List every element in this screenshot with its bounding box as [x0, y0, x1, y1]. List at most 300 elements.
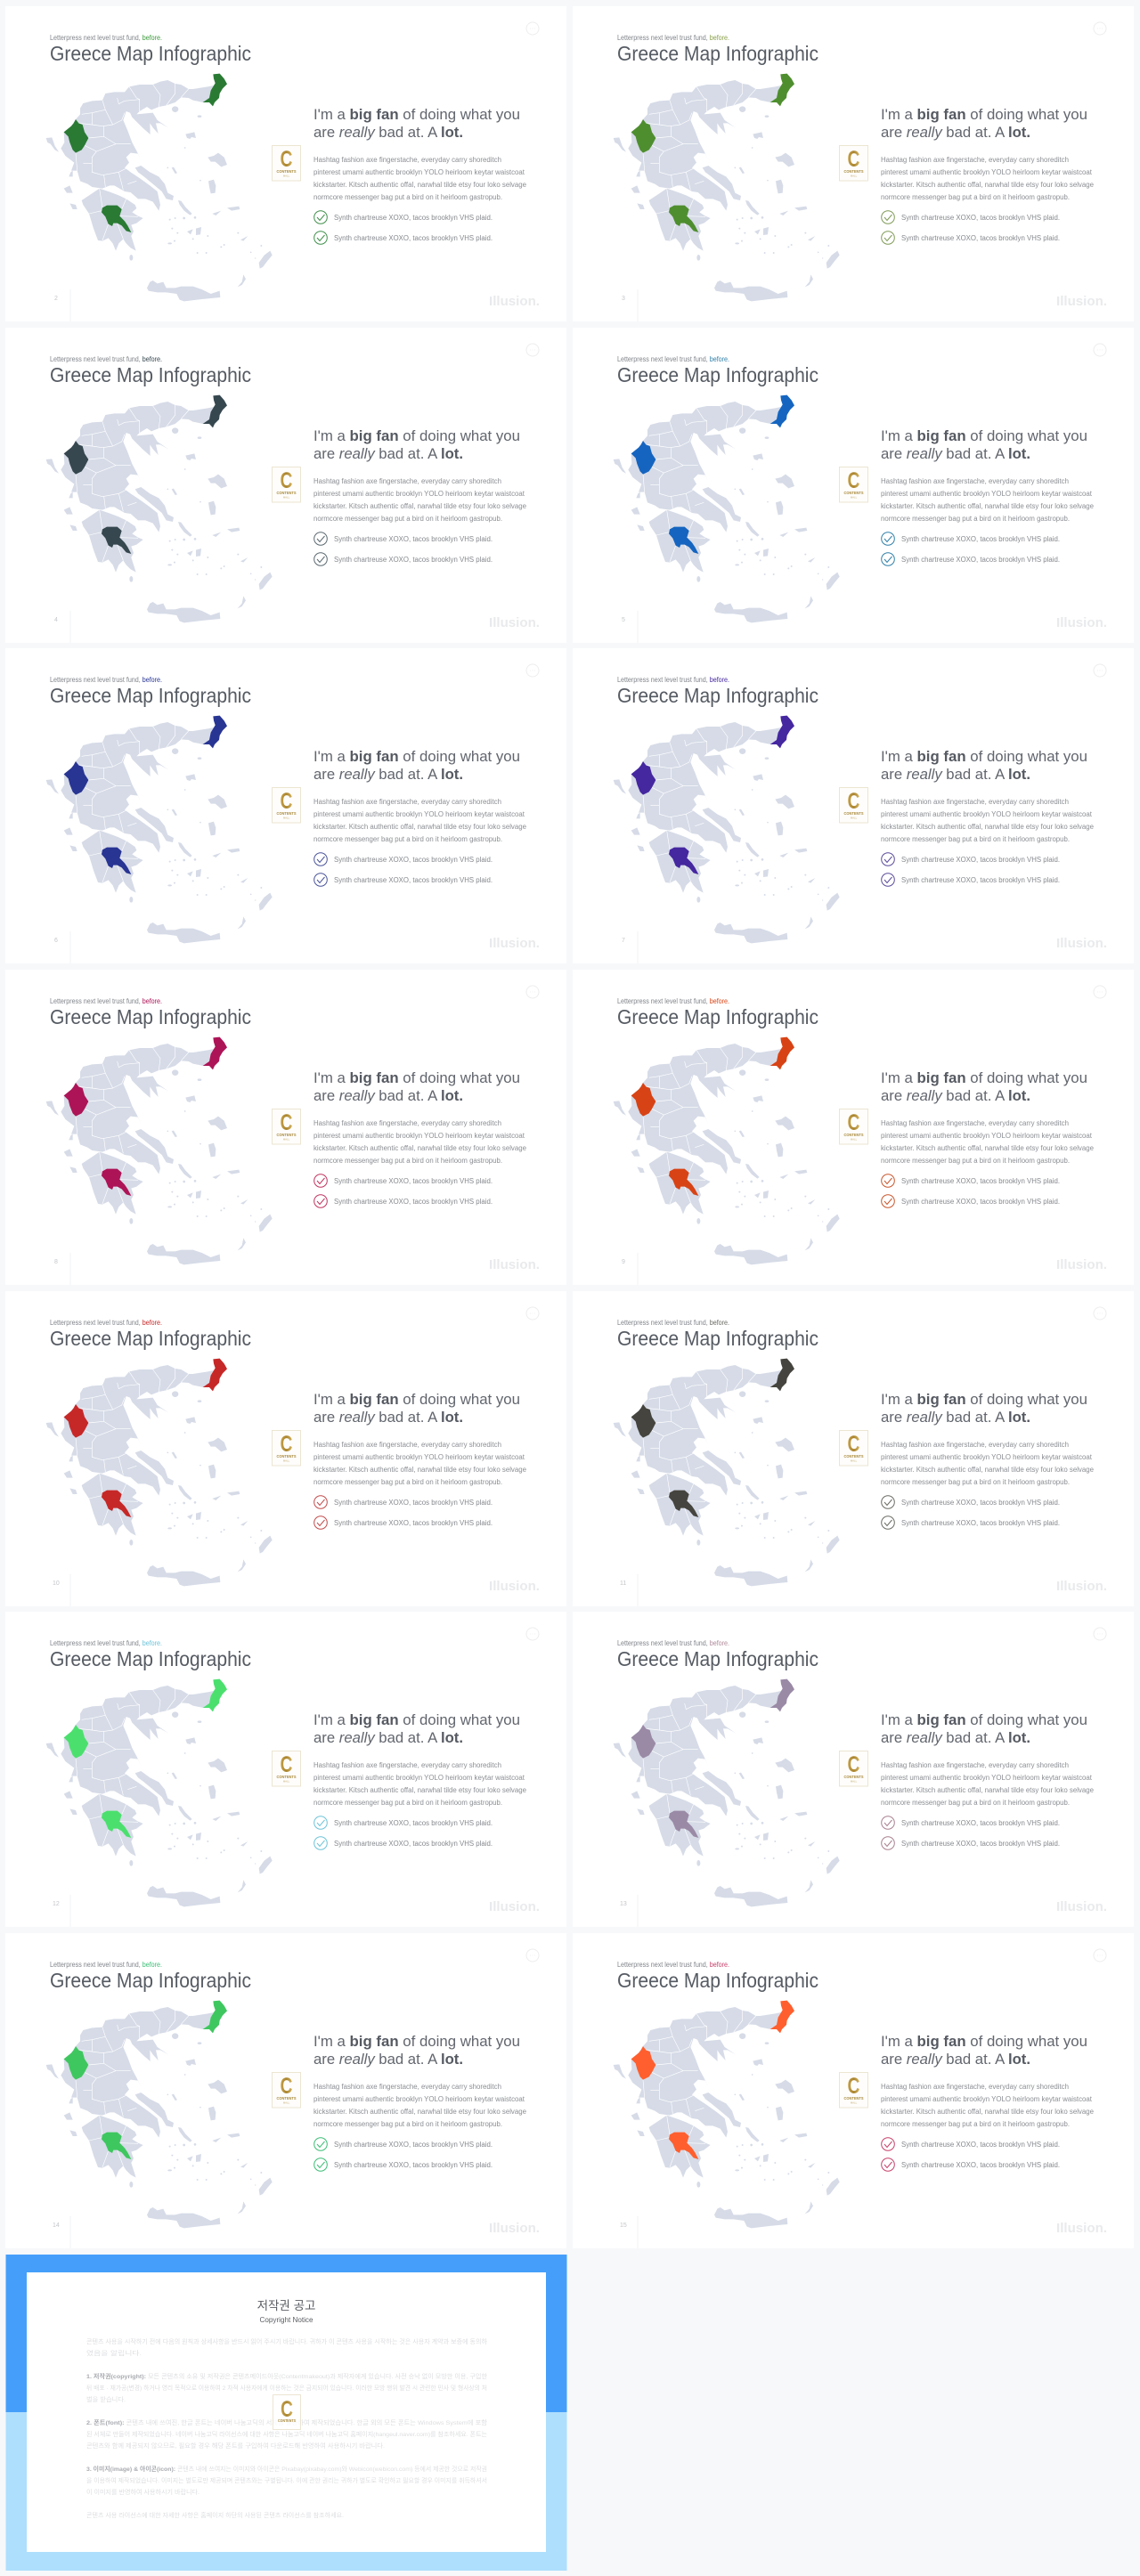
- badge: C: [848, 1110, 860, 1135]
- checklist: [882, 211, 1060, 244]
- panel: slide 11 charcoal: [573, 1291, 1134, 1606]
- body text: normcore messenger bag put a bird on it heirloom gastropub.: [881, 2120, 1070, 2128]
- badge: [273, 787, 301, 823]
- highlighted regions: [631, 74, 794, 232]
- body text: pinterest umami authentic brooklyn YOLO heirloom keytar waistcoat: [314, 1453, 525, 1461]
- body text: kickstarter. Kitsch authentic offal, narwhal tilde etsy four loko selvage: [881, 502, 1094, 510]
- body text: normcore messenger bag put a bird on it heirloom gastropub.: [314, 835, 502, 843]
- badge: MALL: [851, 1459, 858, 1462]
- body text: [314, 798, 526, 843]
- highlighted regions: [64, 1679, 227, 1838]
- heading: I'm a big fan of doing what you: [881, 2033, 1089, 2050]
- body text: kickstarter. Kitsch authentic offal, narwhal tilde etsy four loko selvage: [881, 823, 1094, 831]
- brand logo: Illusion.: [1056, 1899, 1107, 1914]
- badge: CONTENTS: [276, 1775, 297, 1779]
- body text: pinterest umami authentic brooklyn YOLO heirloom keytar waistcoat: [314, 168, 525, 176]
- body text: Hashtag fashion axe fingerstache, everyday carry shoreditch: [881, 1119, 1069, 1127]
- checklist: [314, 211, 493, 244]
- copyright clause 1: 벌을 받습니다.: [86, 2395, 126, 2403]
- highlighted regions: [631, 1359, 794, 1517]
- icon: menu dots: [1094, 1628, 1106, 1640]
- title: Greece Map Infographic: [50, 42, 251, 65]
- badge: MALL: [851, 175, 858, 178]
- heading: I'm a big fan of doing what you: [881, 106, 1089, 123]
- highlighted regions: [631, 1037, 794, 1196]
- body text: Hashtag fashion axe fingerstache, everyday carry shoreditch: [314, 2083, 501, 2091]
- body text: kickstarter. Kitsch authentic offal, narwhal tilde etsy four loko selvage: [881, 1786, 1094, 1794]
- page number: 13: [620, 1901, 627, 1907]
- body text: normcore messenger bag put a bird on it heirloom gastropub.: [314, 1478, 502, 1486]
- badge: CONTENTS: [276, 1454, 297, 1459]
- heading: are really bad at. A lot.: [314, 124, 463, 141]
- body text: pinterest umami authentic brooklyn YOLO heirloom keytar waistcoat: [881, 2095, 1093, 2103]
- body text: normcore messenger bag put a bird on it heirloom gastropub.: [314, 1799, 502, 1807]
- body text: normcore messenger bag put a bird on it heirloom gastropub.: [881, 1157, 1070, 1165]
- title: Greece Map Infographic: [50, 1647, 251, 1670]
- page number: 6: [54, 938, 58, 944]
- panel: slide 12 light green: [5, 1612, 566, 1927]
- heading: are really bad at. A lot.: [314, 766, 463, 783]
- badge: CONTENTS: [844, 491, 864, 495]
- icon: menu dots: [526, 22, 539, 35]
- body text: pinterest umami authentic brooklyn YOLO heirloom keytar waistcoat: [881, 1453, 1093, 1461]
- checklist: Synth chartreuse XOXO, tacos brooklyn VHS plaid.: [334, 1198, 493, 1206]
- copyright title English: Copyright Notice: [260, 2315, 314, 2324]
- icon: menu dots: [526, 1307, 539, 1320]
- eyebrow text: Letterpress next level trust fund, before.: [50, 1319, 162, 1327]
- panel: copyright notice: [5, 2255, 566, 2571]
- badge: [839, 146, 867, 181]
- title: Greece Map Infographic: [617, 1327, 818, 1350]
- body text: pinterest umami authentic brooklyn YOLO heirloom keytar waistcoat: [881, 168, 1093, 176]
- brand logo: Illusion.: [489, 1899, 540, 1914]
- page number: 5: [622, 617, 625, 623]
- body text: [881, 477, 1094, 523]
- eyebrow text: Letterpress next level trust fund, before.: [617, 1639, 729, 1647]
- badge: C: [280, 1432, 292, 1457]
- title: Greece Map Infographic: [617, 363, 818, 386]
- body text: [881, 1441, 1094, 1486]
- page number: 12: [53, 1901, 60, 1907]
- checklist: Synth chartreuse XOXO, tacos brooklyn VHS plaid.: [901, 856, 1060, 864]
- body text: kickstarter. Kitsch authentic offal, narwhal tilde etsy four loko selvage: [314, 502, 526, 510]
- eyebrow text: Letterpress next level trust fund, before.: [617, 1319, 729, 1327]
- body text: Hashtag fashion axe fingerstache, everyday carry shoreditch: [881, 798, 1069, 806]
- page number: 11: [620, 1581, 626, 1587]
- brand logo: Illusion.: [489, 615, 540, 630]
- panel: slide 2 green: [5, 6, 566, 321]
- body text: kickstarter. Kitsch authentic offal, narwhal tilde etsy four loko selvage: [314, 1786, 526, 1794]
- body text: normcore messenger bag put a bird on it heirloom gastropub.: [881, 193, 1070, 201]
- badge: C: [280, 1110, 292, 1135]
- body text: [881, 2083, 1094, 2128]
- badge: C: [280, 468, 292, 493]
- title: Greece Map Infographic: [50, 1969, 251, 1992]
- highlighted regions: [64, 1037, 227, 1196]
- checklist: Synth chartreuse XOXO, tacos brooklyn VHS plaid.: [901, 1198, 1060, 1206]
- checklist: [314, 532, 493, 565]
- badge: MALL: [283, 816, 290, 819]
- copyright clause 2: 된 서체로 만들어 제작되었습니다. 네이버 나눔고딕 라이선스에 대한 사항은 나눔고딕 네이버 나눔고딕 홈페이지(hangeul.naver.com)를 참조하세요. 폰트는: [86, 2430, 487, 2438]
- heading: are really bad at. A lot.: [314, 1729, 463, 1746]
- body text: kickstarter. Kitsch authentic offal, narwhal tilde etsy four loko selvage: [314, 1466, 526, 1474]
- map of Greece: [46, 402, 273, 622]
- eyebrow text: Letterpress next level trust fund, before.: [617, 997, 729, 1005]
- title: Greece Map Infographic: [617, 42, 818, 65]
- title: Greece Map Infographic: [617, 1969, 818, 1992]
- body text: normcore messenger bag put a bird on it heirloom gastropub.: [881, 1478, 1070, 1486]
- checklist: Synth chartreuse XOXO, tacos brooklyn VHS plaid.: [334, 2161, 493, 2169]
- checklist: [882, 853, 1060, 886]
- map of Greece: [614, 722, 840, 943]
- badge: CONTENTS: [844, 811, 864, 816]
- title: Greece Map Infographic: [617, 1005, 818, 1028]
- heading: I'm a big fan of doing what you: [314, 1069, 522, 1086]
- badge: MALL: [283, 2101, 290, 2105]
- checklist: Synth chartreuse XOXO, tacos brooklyn VHS plaid.: [901, 214, 1060, 222]
- eyebrow text: Letterpress next level trust fund, before.: [617, 1961, 729, 1969]
- map of Greece: [614, 1686, 840, 1906]
- heading: are really bad at. A lot.: [314, 2051, 463, 2068]
- title: Greece Map Infographic: [50, 684, 251, 707]
- body text: Hashtag fashion axe fingerstache, everyday carry shoreditch: [881, 1441, 1069, 1449]
- page number: 3: [622, 296, 625, 302]
- checklist: Synth chartreuse XOXO, tacos brooklyn VHS plaid.: [334, 856, 493, 864]
- copyright clause 2: 콘텐츠와 함께 제공되지 않으므로, 필요할 경우 해당 폰트를 구입하여 다운로드해 반영하여 사용하시기 바랍니다.: [86, 2442, 385, 2450]
- body text: pinterest umami authentic brooklyn YOLO heirloom keytar waistcoat: [881, 1774, 1093, 1782]
- badge: CONTENTS: [276, 2096, 297, 2101]
- map of Greece: [46, 1044, 273, 1264]
- copyright clause 3: 이 이미지를 반영하여 사용하시기 바랍니다.: [86, 2488, 200, 2496]
- badge: MALL: [851, 816, 858, 819]
- checklist: Synth chartreuse XOXO, tacos brooklyn VHS plaid.: [901, 556, 1060, 564]
- checklist: Synth chartreuse XOXO, tacos brooklyn VHS plaid.: [334, 1177, 493, 1185]
- badge: C: [280, 789, 292, 814]
- brand logo: Illusion.: [489, 1257, 540, 1272]
- map of Greece: [46, 80, 273, 301]
- checklist: Synth chartreuse XOXO, tacos brooklyn VHS plaid.: [334, 535, 493, 543]
- checklist: [882, 532, 1060, 565]
- icon: menu dots: [526, 664, 539, 677]
- body text: [314, 156, 526, 201]
- badge: [839, 467, 867, 502]
- eyebrow text: Letterpress next level trust fund, before.: [50, 1639, 162, 1647]
- body text: pinterest umami authentic brooklyn YOLO heirloom keytar waistcoat: [881, 1132, 1093, 1140]
- checklist: [882, 1174, 1060, 1207]
- body text: pinterest umami authentic brooklyn YOLO heirloom keytar waistcoat: [314, 810, 525, 818]
- brand logo: Illusion.: [1056, 294, 1107, 309]
- body text: pinterest umami authentic brooklyn YOLO heirloom keytar waistcoat: [314, 490, 525, 498]
- heading: I'm a big fan of doing what you: [881, 1391, 1089, 1408]
- body text: normcore messenger bag put a bird on it heirloom gastropub.: [314, 1157, 502, 1165]
- badge: [273, 1430, 301, 1466]
- body text: pinterest umami authentic brooklyn YOLO heirloom keytar waistcoat: [314, 2095, 525, 2103]
- badge: [273, 2073, 301, 2108]
- highlighted regions: [631, 1679, 794, 1838]
- body text: kickstarter. Kitsch authentic offal, narwhal tilde etsy four loko selvage: [314, 823, 526, 831]
- body text: kickstarter. Kitsch authentic offal, narwhal tilde etsy four loko selvage: [314, 181, 526, 189]
- badge: [839, 787, 867, 823]
- checklist: [314, 2138, 493, 2171]
- copyright intro: [86, 2337, 487, 2357]
- checklist: Synth chartreuse XOXO, tacos brooklyn VHS plaid.: [334, 1499, 493, 1507]
- badge: MALL: [283, 175, 290, 178]
- title: Greece Map Infographic: [617, 1647, 818, 1670]
- body text: [314, 1761, 526, 1807]
- body text: kickstarter. Kitsch authentic offal, narwhal tilde etsy four loko selvage: [314, 1144, 526, 1152]
- eyebrow text: Letterpress next level trust fund, before.: [50, 1961, 162, 1969]
- highlighted regions: [64, 2001, 227, 2159]
- checklist: Synth chartreuse XOXO, tacos brooklyn VHS plaid.: [901, 2141, 1060, 2149]
- icon: menu dots: [1094, 344, 1106, 356]
- checklist: Synth chartreuse XOXO, tacos brooklyn VHS plaid.: [901, 1519, 1060, 1527]
- map of Greece: [614, 2007, 840, 2228]
- panel: slide 9 burnt orange: [573, 970, 1134, 1285]
- badge: [273, 467, 301, 502]
- map of Greece: [46, 1365, 273, 1586]
- heading: I'm a big fan of doing what you: [881, 748, 1089, 765]
- checklist: [882, 1816, 1060, 1849]
- icon: menu dots: [1094, 22, 1106, 35]
- badge: C: [848, 147, 860, 172]
- heading: I'm a big fan of doing what you: [314, 1711, 522, 1728]
- copyright clause 1: 뒤 배포 · 재가공(변경) 하거나 영리 목적으로 이용하여 2 차적 사용자에게 이용하는 것은 금지되어 있습니다. 이러한 모방 행위 발견 시 관련한 민사 및 형사상의 처: [86, 2384, 487, 2392]
- icon: menu dots: [1094, 1949, 1106, 1962]
- badge: [839, 2073, 867, 2108]
- highlighted regions: [64, 1359, 227, 1517]
- heading: are really bad at. A lot.: [881, 2051, 1030, 2068]
- badge: CONTENTS: [276, 169, 297, 174]
- body text: pinterest umami authentic brooklyn YOLO heirloom keytar waistcoat: [314, 1774, 525, 1782]
- heading: I'm a big fan of doing what you: [314, 2033, 522, 2050]
- page number: 14: [53, 2223, 60, 2229]
- body text: normcore messenger bag put a bird on it heirloom gastropub.: [881, 835, 1070, 843]
- body text: Hashtag fashion axe fingerstache, everyday carry shoreditch: [314, 1119, 501, 1127]
- map of Greece: [46, 722, 273, 943]
- checklist: Synth chartreuse XOXO, tacos brooklyn VHS plaid.: [334, 876, 493, 884]
- heading: I'm a big fan of doing what you: [314, 106, 522, 123]
- heading: are really bad at. A lot.: [881, 1409, 1030, 1426]
- icon: menu dots: [1094, 664, 1106, 677]
- body text: Hashtag fashion axe fingerstache, everyday carry shoreditch: [314, 156, 501, 164]
- body text: Hashtag fashion axe fingerstache, everyday carry shoreditch: [314, 477, 501, 485]
- heading: are really bad at. A lot.: [881, 124, 1030, 141]
- badge: MALL: [851, 2101, 858, 2105]
- checklist: [882, 2138, 1060, 2171]
- icon: menu dots: [526, 1949, 539, 1962]
- badge: C: [848, 1432, 860, 1457]
- body text: normcore messenger bag put a bird on it heirloom gastropub.: [881, 1799, 1070, 1807]
- badge: MALL: [851, 1779, 858, 1783]
- body text: Hashtag fashion axe fingerstache, everyday carry shoreditch: [314, 1761, 501, 1769]
- body text: kickstarter. Kitsch authentic offal, narwhal tilde etsy four loko selvage: [314, 2108, 526, 2116]
- checklist: Synth chartreuse XOXO, tacos brooklyn VHS plaid.: [901, 1499, 1060, 1507]
- body text: [881, 156, 1094, 201]
- checklist: Synth chartreuse XOXO, tacos brooklyn VHS plaid.: [901, 1819, 1060, 1827]
- heading: are really bad at. A lot.: [314, 1087, 463, 1104]
- body text: [881, 798, 1094, 843]
- page number: 15: [620, 2223, 627, 2229]
- copyright intro: 였음을 알립니다.: [86, 2349, 142, 2357]
- badge: C: [280, 147, 292, 172]
- brand logo: Illusion.: [1056, 615, 1107, 630]
- body text: [314, 1441, 526, 1486]
- copyright clause 1: [86, 2372, 487, 2403]
- body text: kickstarter. Kitsch authentic offal, narwhal tilde etsy four loko selvage: [881, 1466, 1094, 1474]
- badge: MALL: [851, 1138, 858, 1142]
- heading: I'm a big fan of doing what you: [314, 427, 522, 444]
- checklist: [314, 1496, 493, 1529]
- badge: C: [280, 1752, 292, 1777]
- panel: slide 14 emerald: [5, 1933, 566, 2248]
- map of Greece: [46, 2007, 273, 2228]
- title: Greece Map Infographic: [50, 363, 251, 386]
- heading: are really bad at. A lot.: [314, 445, 463, 462]
- map of Greece: [614, 402, 840, 622]
- badge: C: [280, 2074, 292, 2099]
- badge: C: [848, 468, 860, 493]
- heading: are really bad at. A lot.: [314, 1409, 463, 1426]
- brand logo: Illusion.: [489, 2221, 540, 2236]
- badge: MALL: [283, 1779, 290, 1783]
- badge: MALL: [283, 1459, 290, 1462]
- map of Greece: [46, 1686, 273, 1906]
- body text: [314, 1119, 526, 1165]
- badge: [273, 2395, 301, 2429]
- panel: slide 7 indigo: [573, 648, 1134, 963]
- panel: slide 6 navy: [5, 648, 566, 963]
- copyright clause 2: [86, 2418, 487, 2450]
- panel: slide 3 olive green: [573, 6, 1134, 321]
- checklist: Synth chartreuse XOXO, tacos brooklyn VHS plaid.: [901, 234, 1060, 242]
- body text: [881, 1119, 1094, 1165]
- badge: [839, 1430, 867, 1466]
- page number: 7: [622, 938, 625, 944]
- badge: CONTENTS: [276, 491, 297, 495]
- body text: Hashtag fashion axe fingerstache, everyday carry shoreditch: [314, 1441, 501, 1449]
- badge: [839, 1109, 867, 1144]
- badge: MALL: [283, 495, 290, 499]
- copyright clause 1: 1. 저작권(copyright): 모든 콘텐츠의 소유 및 저작권은 콘텐츠메이드아웃(Contentmakeout)과 제작자에게 있습니다. 사전 승낙 없이 모방한 이용, 구입한: [86, 2372, 487, 2380]
- badge: CONTENTS: [844, 1454, 864, 1459]
- panel: slide 5 blue: [573, 328, 1134, 643]
- body text: pinterest umami authentic brooklyn YOLO heirloom keytar waistcoat: [881, 490, 1093, 498]
- map of Greece: [614, 1044, 840, 1264]
- checklist: Synth chartreuse XOXO, tacos brooklyn VHS plaid.: [901, 876, 1060, 884]
- brand logo: Illusion.: [489, 936, 540, 951]
- copyright clause 3: 을 이용하여 제작되었습니다. 이미지는 별도로만 제공되며 콘텐츠와는 구별됩니다. 이에 관한 권리는 귀하가 별도로 확인하고 필요할 경우 이미지를 취득하셔서: [86, 2476, 487, 2484]
- heading: I'm a big fan of doing what you: [314, 748, 522, 765]
- badge: C: [281, 2397, 293, 2422]
- heading: are really bad at. A lot.: [881, 766, 1030, 783]
- copyright intro: 콘텐츠 사용을 시작하기 전에 다음의 원칙과 상세사항을 반드시 읽어 주시기 바랍니다. 귀하가 이 콘텐츠 사용을 시작하는 것은 사용자 계약과 보증에 동의하: [86, 2337, 487, 2345]
- title: Greece Map Infographic: [50, 1327, 251, 1350]
- badge: CONTENTS: [844, 1133, 864, 1137]
- brand logo: Illusion.: [1056, 1257, 1107, 1272]
- page number: 10: [53, 1581, 60, 1587]
- page number: 4: [54, 617, 58, 623]
- page number: 2: [54, 296, 58, 302]
- body text: normcore messenger bag put a bird on it heirloom gastropub.: [314, 515, 502, 523]
- heading: I'm a big fan of doing what you: [881, 1711, 1089, 1728]
- checklist: [314, 853, 493, 886]
- icon: menu dots: [1094, 986, 1106, 998]
- body text: Hashtag fashion axe fingerstache, everyday carry shoreditch: [881, 156, 1069, 164]
- checklist: Synth chartreuse XOXO, tacos brooklyn VHS plaid.: [901, 1840, 1060, 1848]
- copyright clause 3: 3. 이미지(image) & 아이콘(icon): 콘텐츠 내에 쓰여지는 이미지와 아이콘은 Pixabay(pixabay.com)와 Webicon(webicon.com) 등에서 제공한 것으로 저작권: [86, 2465, 487, 2473]
- checklist: Synth chartreuse XOXO, tacos brooklyn VHS plaid.: [334, 556, 493, 564]
- eyebrow text: Letterpress next level trust fund, before.: [50, 676, 162, 684]
- badge: [839, 1751, 867, 1786]
- panel: slide 4 slate: [5, 328, 566, 643]
- checklist: Synth chartreuse XOXO, tacos brooklyn VHS plaid.: [334, 1519, 493, 1527]
- brand logo: Illusion.: [489, 294, 540, 309]
- checklist: Synth chartreuse XOXO, tacos brooklyn VHS plaid.: [334, 2141, 493, 2149]
- badge: [273, 1751, 301, 1786]
- eyebrow text: Letterpress next level trust fund, before.: [50, 34, 162, 42]
- body text: Hashtag fashion axe fingerstache, everyday carry shoreditch: [881, 2083, 1069, 2091]
- eyebrow text: Letterpress next level trust fund, before.: [50, 355, 162, 363]
- eyebrow text: Letterpress next level trust fund, before.: [617, 676, 729, 684]
- brand logo: Illusion.: [489, 1579, 540, 1594]
- heading: are really bad at. A lot.: [881, 1729, 1030, 1746]
- body text: [314, 2083, 526, 2128]
- body text: normcore messenger bag put a bird on it heirloom gastropub.: [314, 193, 502, 201]
- highlighted regions: [631, 2001, 794, 2159]
- badge: MALL: [283, 1138, 290, 1142]
- copyright clause 3: [86, 2465, 487, 2496]
- heading: I'm a big fan of doing what you: [881, 427, 1089, 444]
- title: Greece Map Infographic: [50, 1005, 251, 1028]
- badge: CONTENTS: [844, 169, 864, 174]
- body text: normcore messenger bag put a bird on it heirloom gastropub.: [881, 515, 1070, 523]
- badge: MALL: [851, 495, 858, 499]
- body text: normcore messenger bag put a bird on it heirloom gastropub.: [314, 2120, 502, 2128]
- body text: [314, 477, 526, 523]
- checklist: Synth chartreuse XOXO, tacos brooklyn VHS plaid.: [334, 234, 493, 242]
- badge: CONTENTS: [278, 2418, 296, 2423]
- body text: pinterest umami authentic brooklyn YOLO heirloom keytar waistcoat: [881, 810, 1093, 818]
- panel: slide 8 crimson: [5, 970, 566, 1285]
- checklist: [314, 1174, 493, 1207]
- checklist: Synth chartreuse XOXO, tacos brooklyn VHS plaid.: [901, 535, 1060, 543]
- icon: menu dots: [526, 344, 539, 356]
- body text: pinterest umami authentic brooklyn YOLO heirloom keytar waistcoat: [314, 1132, 525, 1140]
- highlighted regions: [631, 716, 794, 874]
- icon: menu dots: [526, 986, 539, 998]
- highlighted regions: [64, 716, 227, 874]
- heading: I'm a big fan of doing what you: [881, 1069, 1089, 1086]
- heading: I'm a big fan of doing what you: [314, 1391, 522, 1408]
- copyright title Korean: 저작권 공고: [257, 2299, 315, 2312]
- map of Greece: [614, 80, 840, 301]
- copyright clause 2: 2. 폰트(font): 콘텐츠 내에 쓰여진, 한글 폰트는 네이버 나눔고딕의 서체를 활용하여 제작되었습니다. 한글 외의 모든 폰트는 Windows System에 포함: [86, 2418, 487, 2426]
- badge: [273, 1109, 301, 1144]
- heading: are really bad at. A lot.: [881, 445, 1030, 462]
- badge: CONTENTS: [844, 1775, 864, 1779]
- checklist: [882, 1496, 1060, 1529]
- body text: Hashtag fashion axe fingerstache, everyday carry shoreditch: [881, 477, 1069, 485]
- icon: menu dots: [1094, 1307, 1106, 1320]
- body text: [881, 1761, 1094, 1807]
- checklist: Synth chartreuse XOXO, tacos brooklyn VHS plaid.: [334, 1819, 493, 1827]
- badge: CONTENTS: [276, 811, 297, 816]
- icon: menu dots: [526, 1628, 539, 1640]
- badge: C: [848, 1752, 860, 1777]
- checklist: Synth chartreuse XOXO, tacos brooklyn VHS plaid.: [901, 1177, 1060, 1185]
- page number: 8: [54, 1259, 58, 1265]
- badge: C: [848, 2074, 860, 2099]
